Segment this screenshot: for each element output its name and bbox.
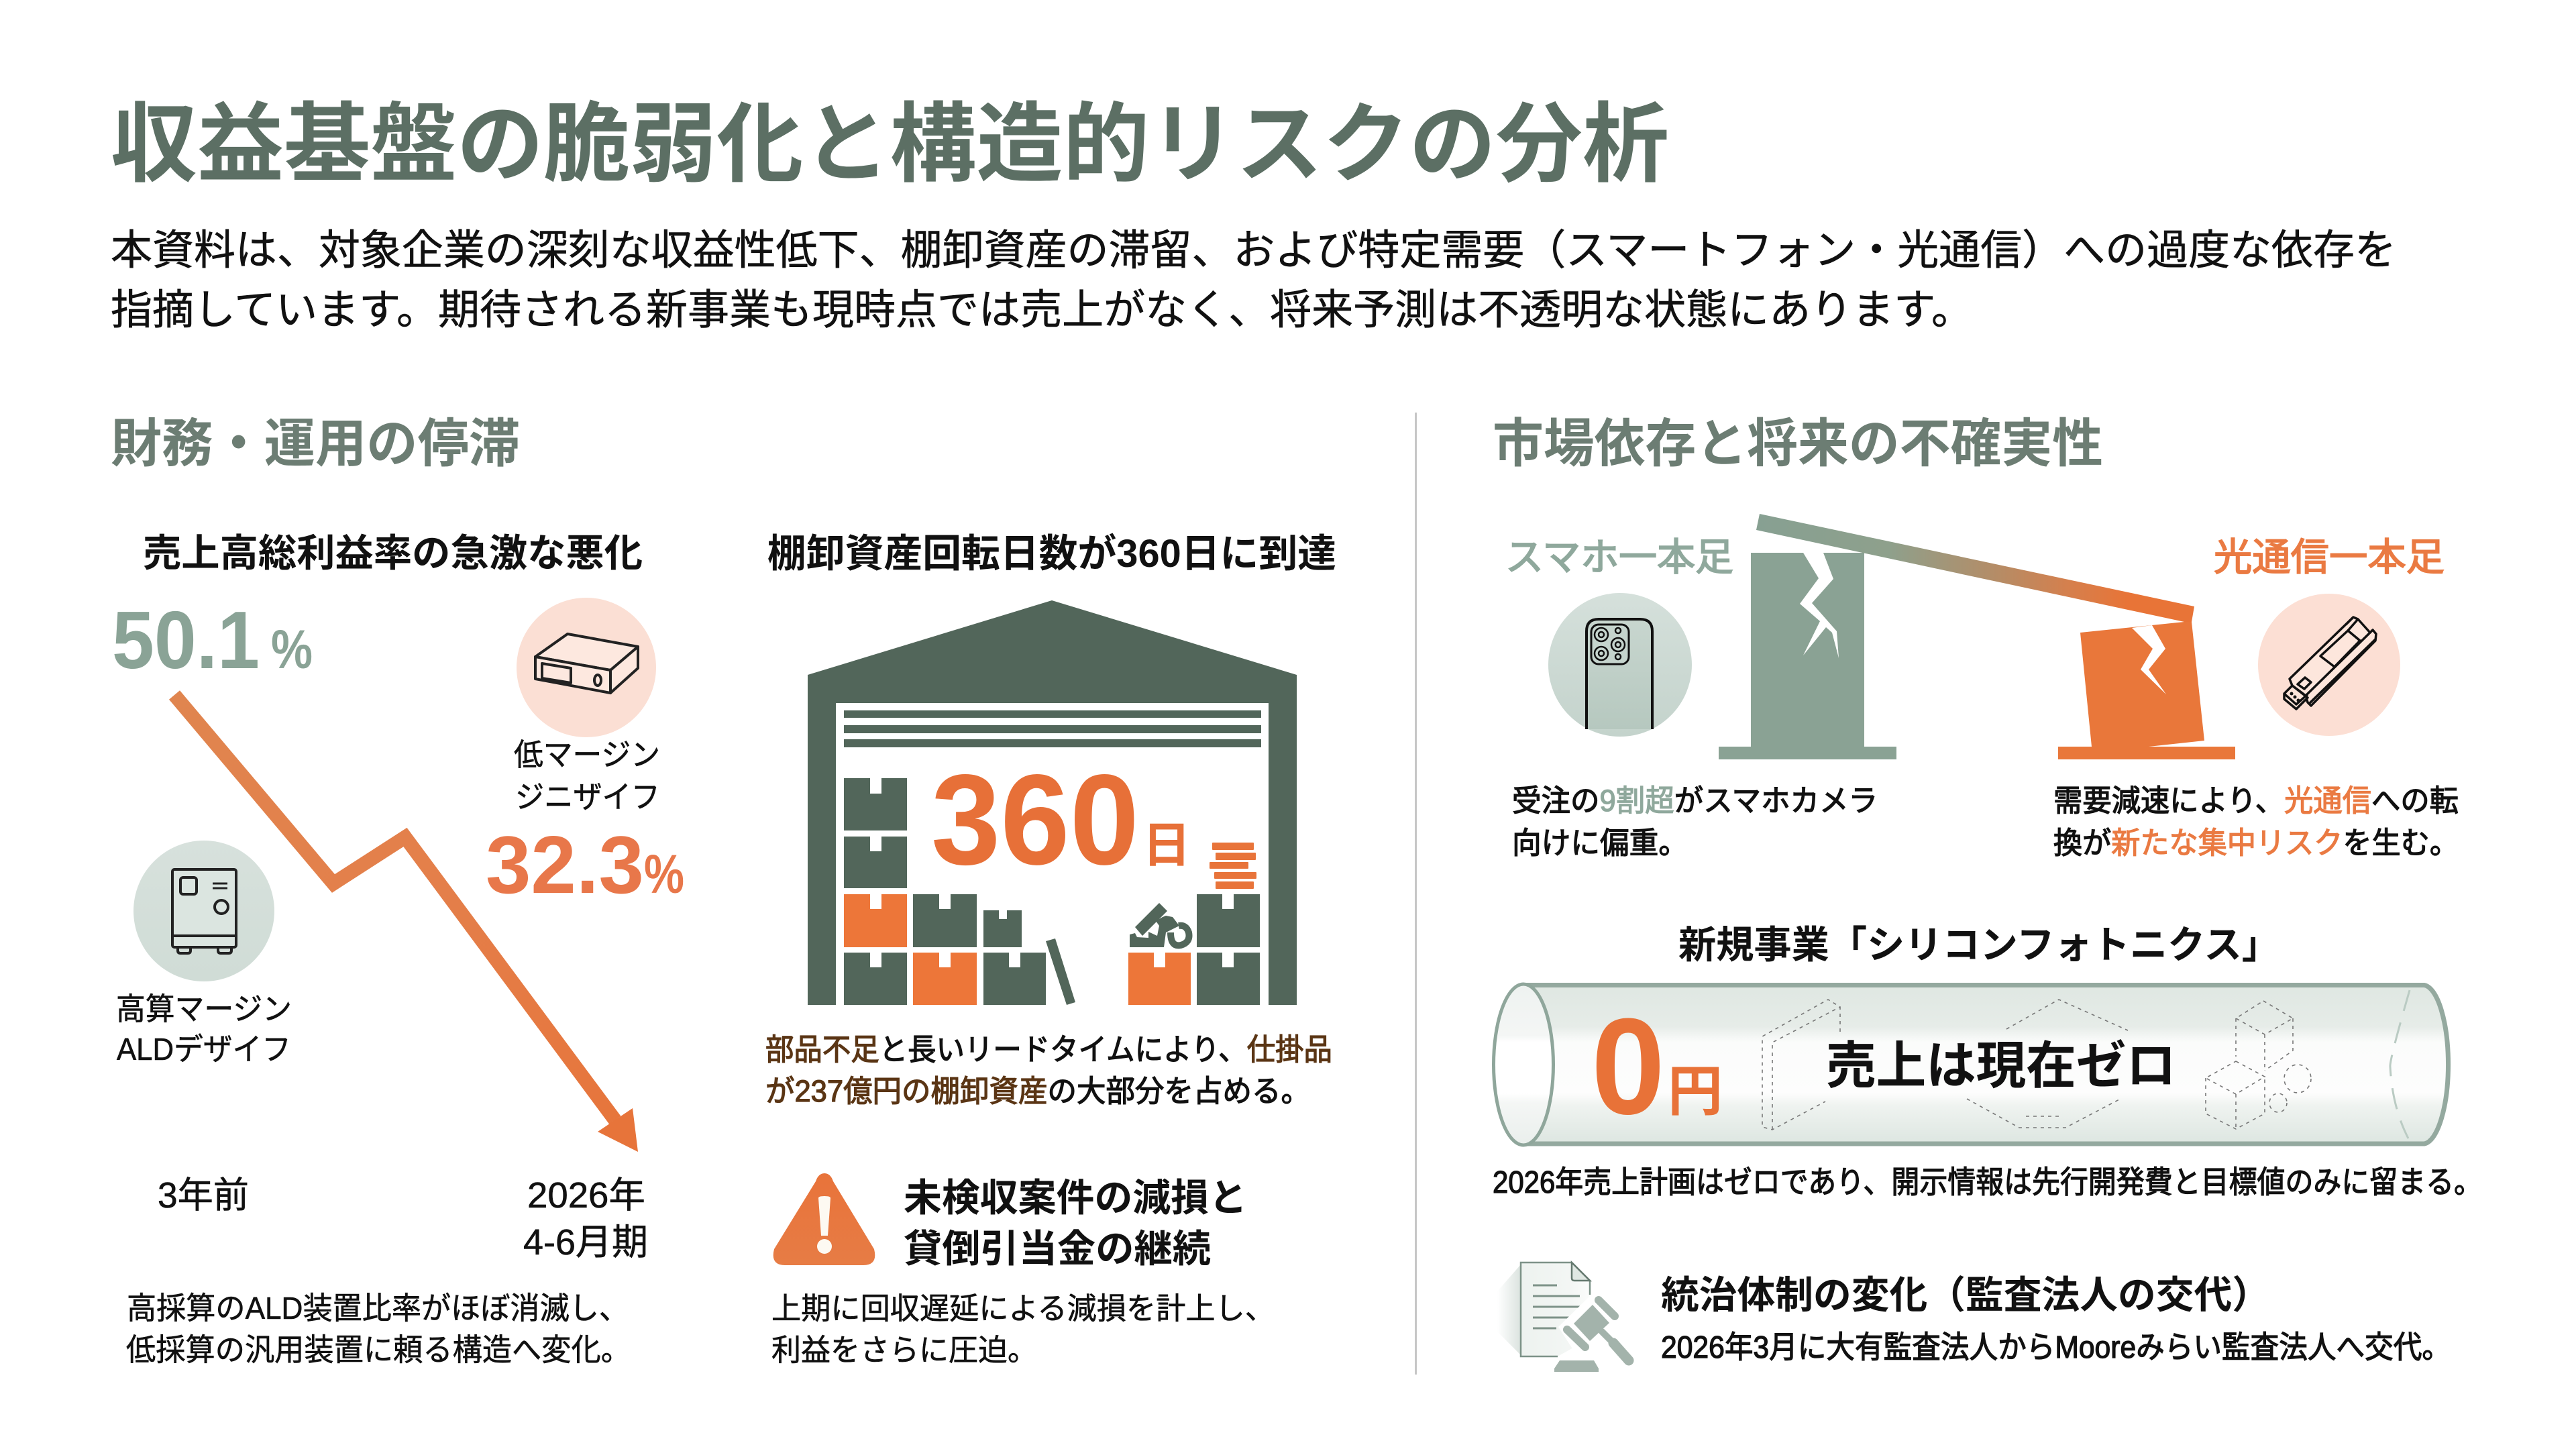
axis label: three years ago: 3年前 (158, 1175, 249, 1216)
note: impairment: 上期に回収遅延による減損を計上し、 (771, 1291, 1275, 1326)
heading: impairment: 未検収案件の減損と (904, 1177, 1247, 1220)
note: smartphone (1512, 784, 1878, 860)
value: zero yen: 円 (1668, 1061, 1723, 1122)
heading: inventory: 棚卸資産回転日数が360日に到達 (767, 532, 1336, 576)
icon: smartphone (1548, 593, 1692, 737)
value: 360 days: 日 (1142, 819, 1191, 873)
intro text: 指摘しています。期待される新事業も現時点では売上がなく、将来予測は不透明な状態にあります。 (111, 287, 1973, 333)
value: zero yen (1591, 990, 1723, 1143)
label: high margin: ALDデザイフ (117, 1032, 291, 1067)
warehouse illustration (808, 600, 1297, 1005)
section heading: market: 市場依存と将来の不確実性 (1493, 414, 2103, 473)
title: 収益基盤の脆弱化と構造的リスクの分析 (111, 95, 1669, 193)
value: 50.1%: % (271, 619, 313, 680)
note: optical (2053, 784, 2459, 860)
axis label: 2026 Q: 2026年 (527, 1175, 645, 1216)
note: optical: 需要減速により、光通信への転 (2053, 784, 2459, 818)
boxes (844, 778, 1260, 1005)
tools pile (1130, 903, 1189, 947)
panel: silicon photonics (1493, 924, 2482, 1199)
orange slats (1210, 843, 1256, 889)
note: optical: 換が新たな集中リスクを生む。 (2053, 826, 2459, 860)
intro text: 本資料は、対象企業の深刻な収益性低下、棚卸資産の滞留、および特定需要（スマートフォン・光通信）への過度な依存を (111, 227, 2396, 274)
tube illustration (1493, 984, 2449, 1145)
section heading: finance: 財務・運用の停滞 (111, 414, 520, 473)
seesaw illustration (1719, 514, 2235, 759)
label: low margin (514, 737, 660, 814)
panel: governance (1497, 1263, 2451, 1372)
declining arrow (174, 695, 638, 1152)
icon: document and gavel (1497, 1263, 1629, 1372)
note: margin: 低採算の汎用装置に頼る構造へ変化。 (126, 1332, 631, 1367)
label: high margin (116, 991, 292, 1067)
icon: warning triangle (773, 1173, 875, 1265)
panel: market dependence (1505, 514, 2459, 860)
panel: gross margin (112, 532, 684, 1367)
label: high margin: 高算マージン (116, 991, 292, 1026)
heading: impairment (904, 1177, 1247, 1271)
tube label: 売上は現在ゼロ (1826, 1038, 2176, 1095)
value: 32.3%: % (644, 844, 684, 905)
note: margin: 高採算のALD装置比率がほぼ消滅し、 (127, 1291, 629, 1326)
icon: optical transceiver (2258, 594, 2400, 736)
axis label: 2026 Q: 4-6月期 (523, 1222, 648, 1263)
label: low margin: 低マージン (514, 737, 660, 772)
note: governance: 2026年3月に大有監査法人からMooreみらい監査法人へ交代。 (1661, 1330, 2451, 1364)
vertical divider (1415, 413, 1417, 1375)
note: inventory (765, 1032, 1332, 1108)
heading: silicon photonics: 新規事業「シリコンフォトニクス」 (1678, 924, 2279, 967)
heading: impairment: 貸倒引当金の継続 (904, 1228, 1211, 1271)
note: inventory: が237億円の棚卸資産の大部分を占める。 (765, 1074, 1310, 1108)
note: silicon photonics: 2026年売上計画はゼロであり、開示情報は先行開発費と目標値のみに留まる。 (1493, 1165, 2482, 1199)
icon: high margin ALD device (133, 841, 274, 981)
value: zero yen: 0 (1591, 990, 1665, 1143)
note: inventory: 部品不足と長いリードタイムにより、仕掛品 (765, 1032, 1332, 1067)
label: low margin: ジニザイフ (515, 780, 660, 814)
value: 50.1%: 50.1 (112, 594, 260, 686)
icon: low margin device (517, 598, 656, 737)
label: optical: 光通信一本足 (2214, 536, 2445, 579)
note: margin (126, 1291, 631, 1367)
heading: gross margin: 売上高総利益率の急激な悪化 (143, 532, 643, 575)
label: smartphone: スマホ一本足 (1505, 536, 1733, 579)
panel: inventory (765, 532, 1336, 1367)
dashed wireframe shapes (1762, 1000, 2311, 1130)
value: 32.3%: 32.3 (486, 819, 644, 910)
axis label: 2026 Q (523, 1175, 648, 1263)
note: smartphone: 向けに偏重。 (1512, 826, 1688, 860)
intro text (111, 227, 2396, 333)
note: impairment: 利益をさらに圧迫。 (771, 1333, 1037, 1367)
value: 360 days: 360 (931, 747, 1139, 892)
note: impairment (771, 1291, 1275, 1367)
note: smartphone: 受注の9割超がスマホカメラ (1512, 784, 1878, 818)
heading: governance: 統治体制の変化（監査法人の交代） (1661, 1274, 2270, 1317)
